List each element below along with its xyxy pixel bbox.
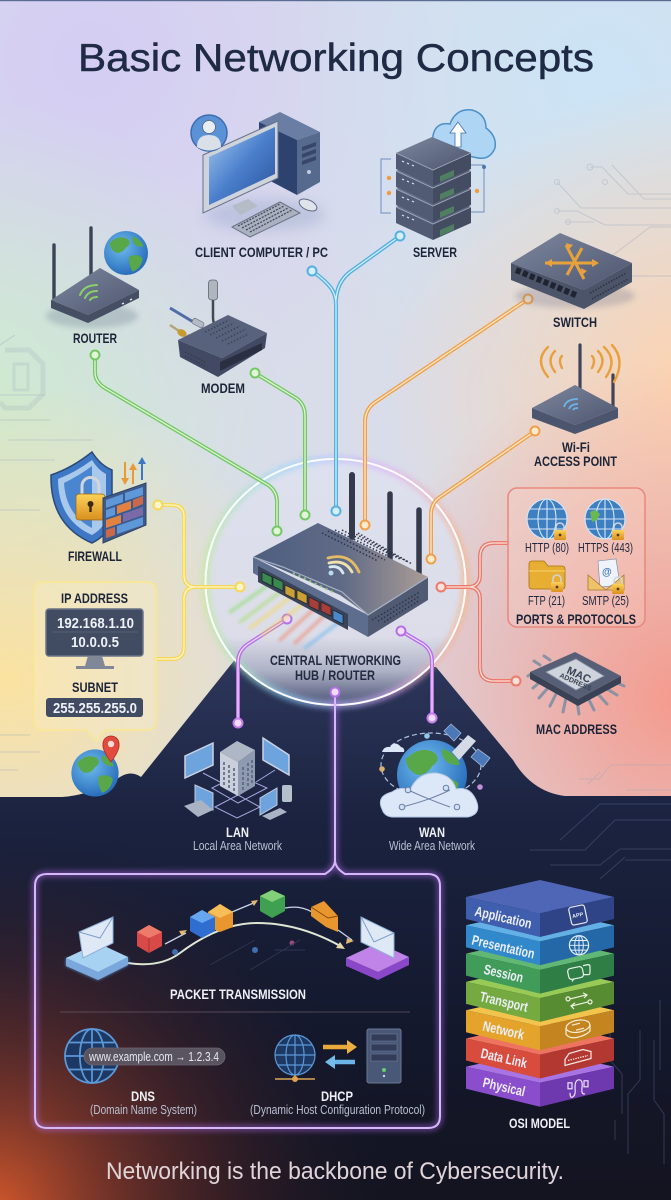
light streaks from ports — [230, 586, 339, 648]
icon: server stack — [381, 137, 486, 240]
route traces — [128, 900, 354, 970]
connector: Wi-Fi access point — [426, 426, 540, 564]
layer: application: Application — [473, 903, 533, 931]
layer: physical: Physical — [481, 1074, 527, 1099]
layer: data link: Data Link — [479, 1045, 529, 1071]
layer: presentation: Presentation — [470, 932, 536, 962]
dark lower background — [0, 657, 671, 1200]
label: local area network: Local Area Network — [193, 838, 282, 853]
connector: LAN and WAN — [234, 614, 436, 728]
icon: shield — [51, 452, 112, 543]
label: central hub line 2: HUB / ROUTER — [295, 667, 375, 683]
label: server: SERVER — [413, 244, 457, 260]
label: LAN: LAN — [226, 824, 249, 840]
icon: hub router body — [253, 523, 428, 637]
panel: MAC address — [528, 652, 624, 737]
decorative circuit traces: dark area — [530, 804, 671, 1164]
icon: brick wall — [103, 457, 146, 543]
connector: switch — [360, 294, 532, 530]
panel: firewall — [51, 452, 146, 564]
layer: transport — [466, 965, 614, 1022]
label: subnet: SUBNET — [72, 679, 118, 695]
panel: ports and protocols — [508, 488, 645, 627]
layer: physical — [466, 1050, 614, 1107]
icon: USB cable — [568, 1080, 588, 1097]
label: FTP: FTP (21) — [528, 593, 565, 608]
icon: HTTPS globe — [585, 499, 625, 540]
layer: data link — [466, 1022, 614, 1078]
connector: client and server — [308, 232, 404, 516]
panel: LAN — [184, 738, 292, 853]
icon: access point — [532, 345, 620, 434]
icon: cloud with upload arrow — [433, 110, 495, 158]
subnet value box: 255.255.255.0 — [53, 700, 137, 717]
icon: router — [565, 1018, 591, 1038]
label: WAN: WAN — [419, 824, 445, 840]
connector: firewall and IP — [154, 500, 244, 659]
DHCP graphic — [275, 1029, 401, 1083]
decorative circuit traces: light area — [0, 164, 671, 790]
icon: user badge — [191, 115, 227, 151]
icon: globe — [569, 936, 589, 955]
icon: app badge — [568, 905, 588, 925]
icon: chat bubbles — [567, 965, 590, 982]
layer: presentation — [466, 908, 614, 965]
icon: chip: ADDRESS — [558, 672, 593, 693]
layer: session — [466, 937, 614, 994]
label: router: ROUTER — [73, 330, 117, 346]
icon: office LAN — [184, 738, 292, 820]
connector: router — [90, 350, 282, 536]
panel: OSI model stack — [466, 880, 614, 1131]
icon: globe, cloud and satellite — [379, 724, 490, 817]
layer: transport: Transport — [478, 988, 530, 1015]
icon: network switch — [565, 1050, 591, 1066]
icon: app badge: APP — [572, 912, 584, 920]
panel: modem — [170, 280, 267, 396]
label: firewall: FIREWALL — [68, 548, 122, 564]
icon: hub antennas — [352, 475, 419, 574]
connector: modem — [250, 368, 310, 520]
connector lines: hub to devices — [90, 232, 540, 728]
source platform — [66, 917, 128, 980]
icon: globe with location pin — [71, 736, 119, 797]
label: client computer: CLIENT COMPUTER / PC — [195, 244, 328, 260]
panel: client computer — [191, 112, 328, 260]
panel: server — [381, 110, 495, 260]
layer: application — [466, 880, 614, 937]
label: IP address: IP ADDRESS — [61, 590, 128, 606]
icon: home router — [46, 228, 139, 328]
divider — [60, 1011, 410, 1013]
icon: monitor with IP values — [46, 609, 143, 669]
label: central hub line 1: CENTRAL NETWORKING — [270, 652, 401, 668]
panel: Wi-Fi access point — [532, 345, 620, 469]
layer: network — [466, 993, 614, 1050]
panel: packets, DNS and DHCP — [35, 688, 440, 1128]
panel frame with connector — [35, 688, 440, 1128]
destination platform — [346, 917, 409, 980]
icon: HTTP globe — [527, 499, 567, 540]
DNS graphic: www.example.com → 1.2.3.4 — [88, 1050, 219, 1064]
label: Wi-Fi: Wi-Fi — [562, 439, 590, 455]
label: access point: ACCESS POINT — [534, 453, 617, 469]
footer tagline: Networking is the backbone of Cybersecurity. — [106, 1158, 564, 1185]
label: modem: MODEM — [201, 380, 245, 396]
orange corner glow — [0, 790, 671, 1200]
label: ports and protocols: PORTS & PROTOCOLS — [516, 611, 636, 627]
label: DHCP: DHCP — [321, 1088, 353, 1104]
panel: router — [46, 228, 148, 346]
packet transmission graphic — [66, 890, 409, 980]
panel: switch — [511, 233, 635, 330]
icon: arrows — [566, 993, 592, 1009]
layer: session: Session — [482, 961, 525, 986]
label: HTTP: HTTP (80) — [525, 540, 569, 555]
label: wide area network: Wide Area Network — [389, 838, 475, 853]
icon: network switch — [511, 233, 635, 309]
connector: ports and MAC — [436, 543, 520, 686]
icon: FTP folder — [529, 561, 565, 592]
label: SMTP: SMTP (25) — [582, 593, 629, 608]
DNS graphic — [65, 1029, 225, 1083]
icon: globe — [104, 231, 148, 275]
icon: chip — [528, 652, 624, 714]
panel: central hub — [230, 475, 428, 683]
label: switch: SWITCH — [553, 314, 597, 330]
label: domain name system: (Domain Name System) — [90, 1102, 197, 1117]
layer: network: Network — [481, 1018, 526, 1043]
icon: modem with cables — [170, 280, 267, 377]
icon: chip: MAC — [565, 665, 593, 686]
central glow ring — [206, 459, 466, 705]
label: dynamic host configuration protocol: (Dynamic Host Configuration Protocol) — [250, 1102, 425, 1117]
icon: monitor with IP values: 192.168.1.10 — [57, 615, 134, 632]
label: MAC address: MAC ADDRESS — [536, 721, 617, 737]
label: packet transmission: PACKET TRANSMISSION — [170, 986, 306, 1002]
panel: IP address and subnet — [34, 582, 156, 741]
icon: desktop PC — [203, 112, 325, 237]
packet cubes — [137, 890, 338, 953]
title: Basic Networking Concepts — [78, 37, 594, 80]
icon: monitor with IP values: 10.0.0.5 — [71, 634, 119, 651]
panel: WAN — [379, 724, 490, 853]
label: HTTPS: HTTPS (443) — [578, 540, 633, 555]
icon: SMTP envelope: @ — [602, 567, 612, 578]
label: OSI model: OSI MODEL — [509, 1115, 570, 1131]
label: DNS: DNS — [131, 1088, 155, 1104]
